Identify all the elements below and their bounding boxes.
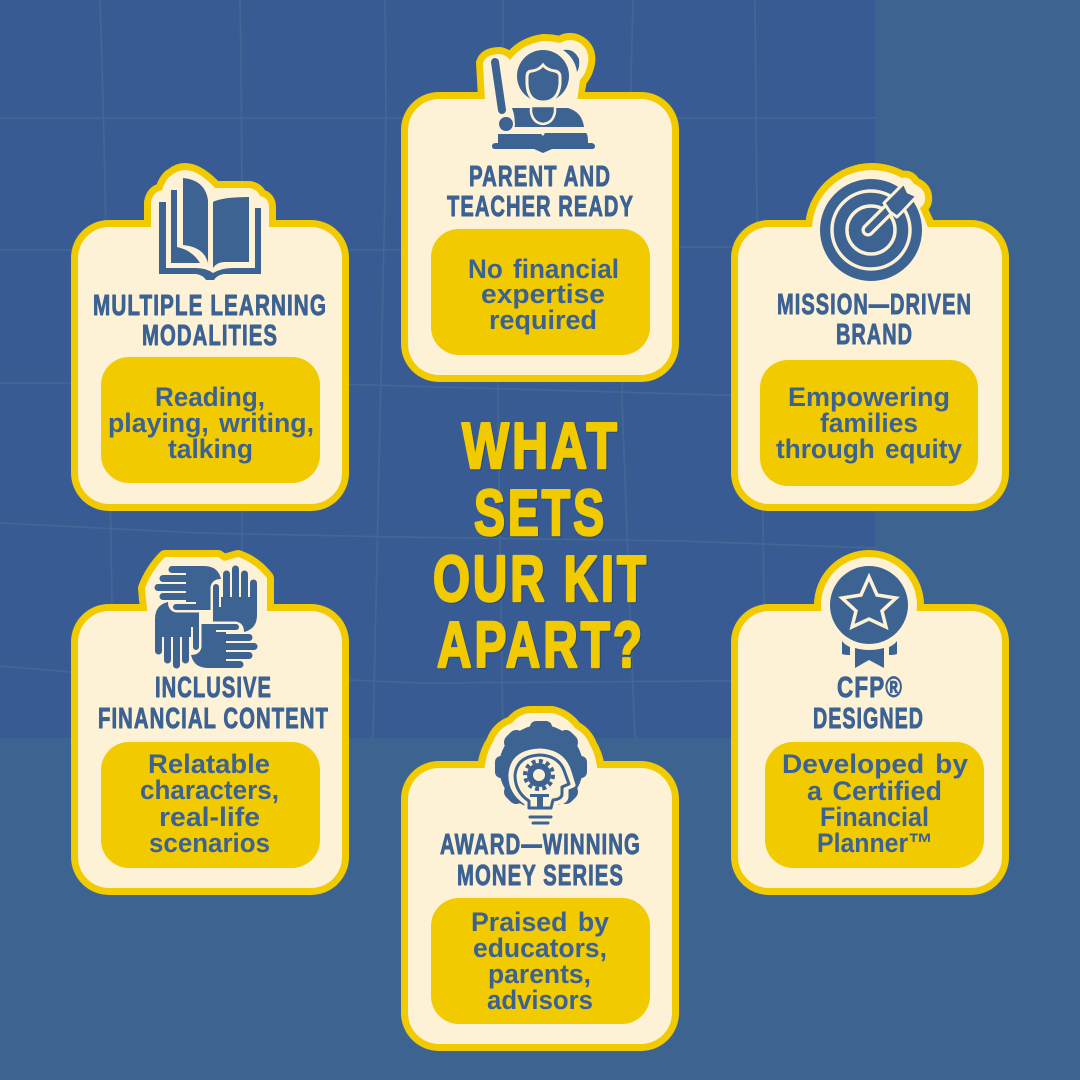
title: SETS — [474, 476, 607, 549]
pill: description: Financial — [820, 802, 929, 832]
heading: DESIGNED — [813, 703, 924, 735]
pill: description — [431, 229, 650, 355]
heading: TEACHER READY — [447, 191, 634, 223]
pill: description — [765, 742, 984, 868]
card frame — [731, 557, 1009, 895]
card frame — [401, 713, 679, 1051]
card frame — [731, 170, 1009, 511]
card frame — [401, 40, 679, 382]
pill: description — [101, 357, 320, 483]
heading — [440, 829, 641, 892]
icon: gear head lightbulb — [495, 721, 587, 823]
pill: description: characters, — [140, 775, 279, 805]
panel: inclusive financial content — [71, 557, 349, 895]
icon: medal with star — [830, 566, 908, 668]
pill: description: Developed by — [782, 749, 968, 779]
panel: award-winning money series — [401, 713, 679, 1051]
heading: MODALITIES — [142, 320, 278, 352]
heading: MULTIPLE LEARNING — [93, 290, 327, 322]
panel: parent and teacher ready — [401, 40, 679, 382]
pill: description: Empowering — [788, 382, 950, 412]
heading: AWARD—WINNING — [440, 829, 641, 861]
title: APART? — [437, 608, 645, 681]
panel: CFP designed — [731, 557, 1009, 895]
pill: description: real-life — [159, 802, 260, 832]
heading: INCLUSIVE — [155, 672, 272, 704]
pill: description: No financial — [468, 254, 619, 284]
pill: description: talking — [168, 434, 253, 464]
pill: description: advisors — [487, 985, 593, 1015]
pill: description: required — [489, 305, 597, 335]
pill: description: Relatable — [148, 749, 270, 779]
pill: description — [760, 360, 978, 486]
heading: MONEY SERIES — [457, 860, 624, 892]
heading — [447, 161, 634, 223]
heading: BRAND — [836, 319, 913, 351]
icon: open book — [159, 178, 261, 280]
heading: MISSION—DRIVEN — [777, 289, 972, 321]
pill: description: a Certified — [807, 776, 942, 806]
icon: target with arrow — [820, 179, 922, 281]
panel: mission-driven brand — [731, 170, 1009, 511]
pill: description: Reading, — [155, 382, 265, 412]
pill: description — [431, 898, 650, 1024]
panel: multiple learning modalities — [71, 170, 349, 511]
heading — [98, 672, 329, 735]
pill: description — [101, 742, 320, 868]
heading: PARENT AND — [469, 161, 611, 193]
title: OUR KIT — [433, 542, 649, 615]
pill: description: educators, — [473, 933, 607, 963]
title: WHAT — [462, 409, 620, 482]
card frame — [71, 557, 349, 895]
pill: description: Planner™ — [817, 828, 933, 858]
title — [433, 409, 649, 681]
heading — [813, 672, 924, 735]
pill: description: scenarios — [149, 828, 270, 858]
heading: CFP® — [837, 672, 903, 704]
pill: description: Praised by — [471, 907, 609, 937]
pill: description: expertise — [481, 279, 605, 309]
pill: description: through equity — [776, 434, 962, 464]
pill: description: parents, — [488, 959, 591, 989]
pill: description: playing, writing, — [108, 408, 314, 438]
pill: description: families — [820, 408, 918, 438]
heading — [777, 289, 972, 351]
card frame — [71, 170, 349, 511]
heading: FINANCIAL CONTENT — [98, 703, 329, 735]
icon: teacher with book — [492, 50, 595, 153]
heading — [93, 290, 327, 352]
icon: four joined hands — [154, 566, 258, 668]
